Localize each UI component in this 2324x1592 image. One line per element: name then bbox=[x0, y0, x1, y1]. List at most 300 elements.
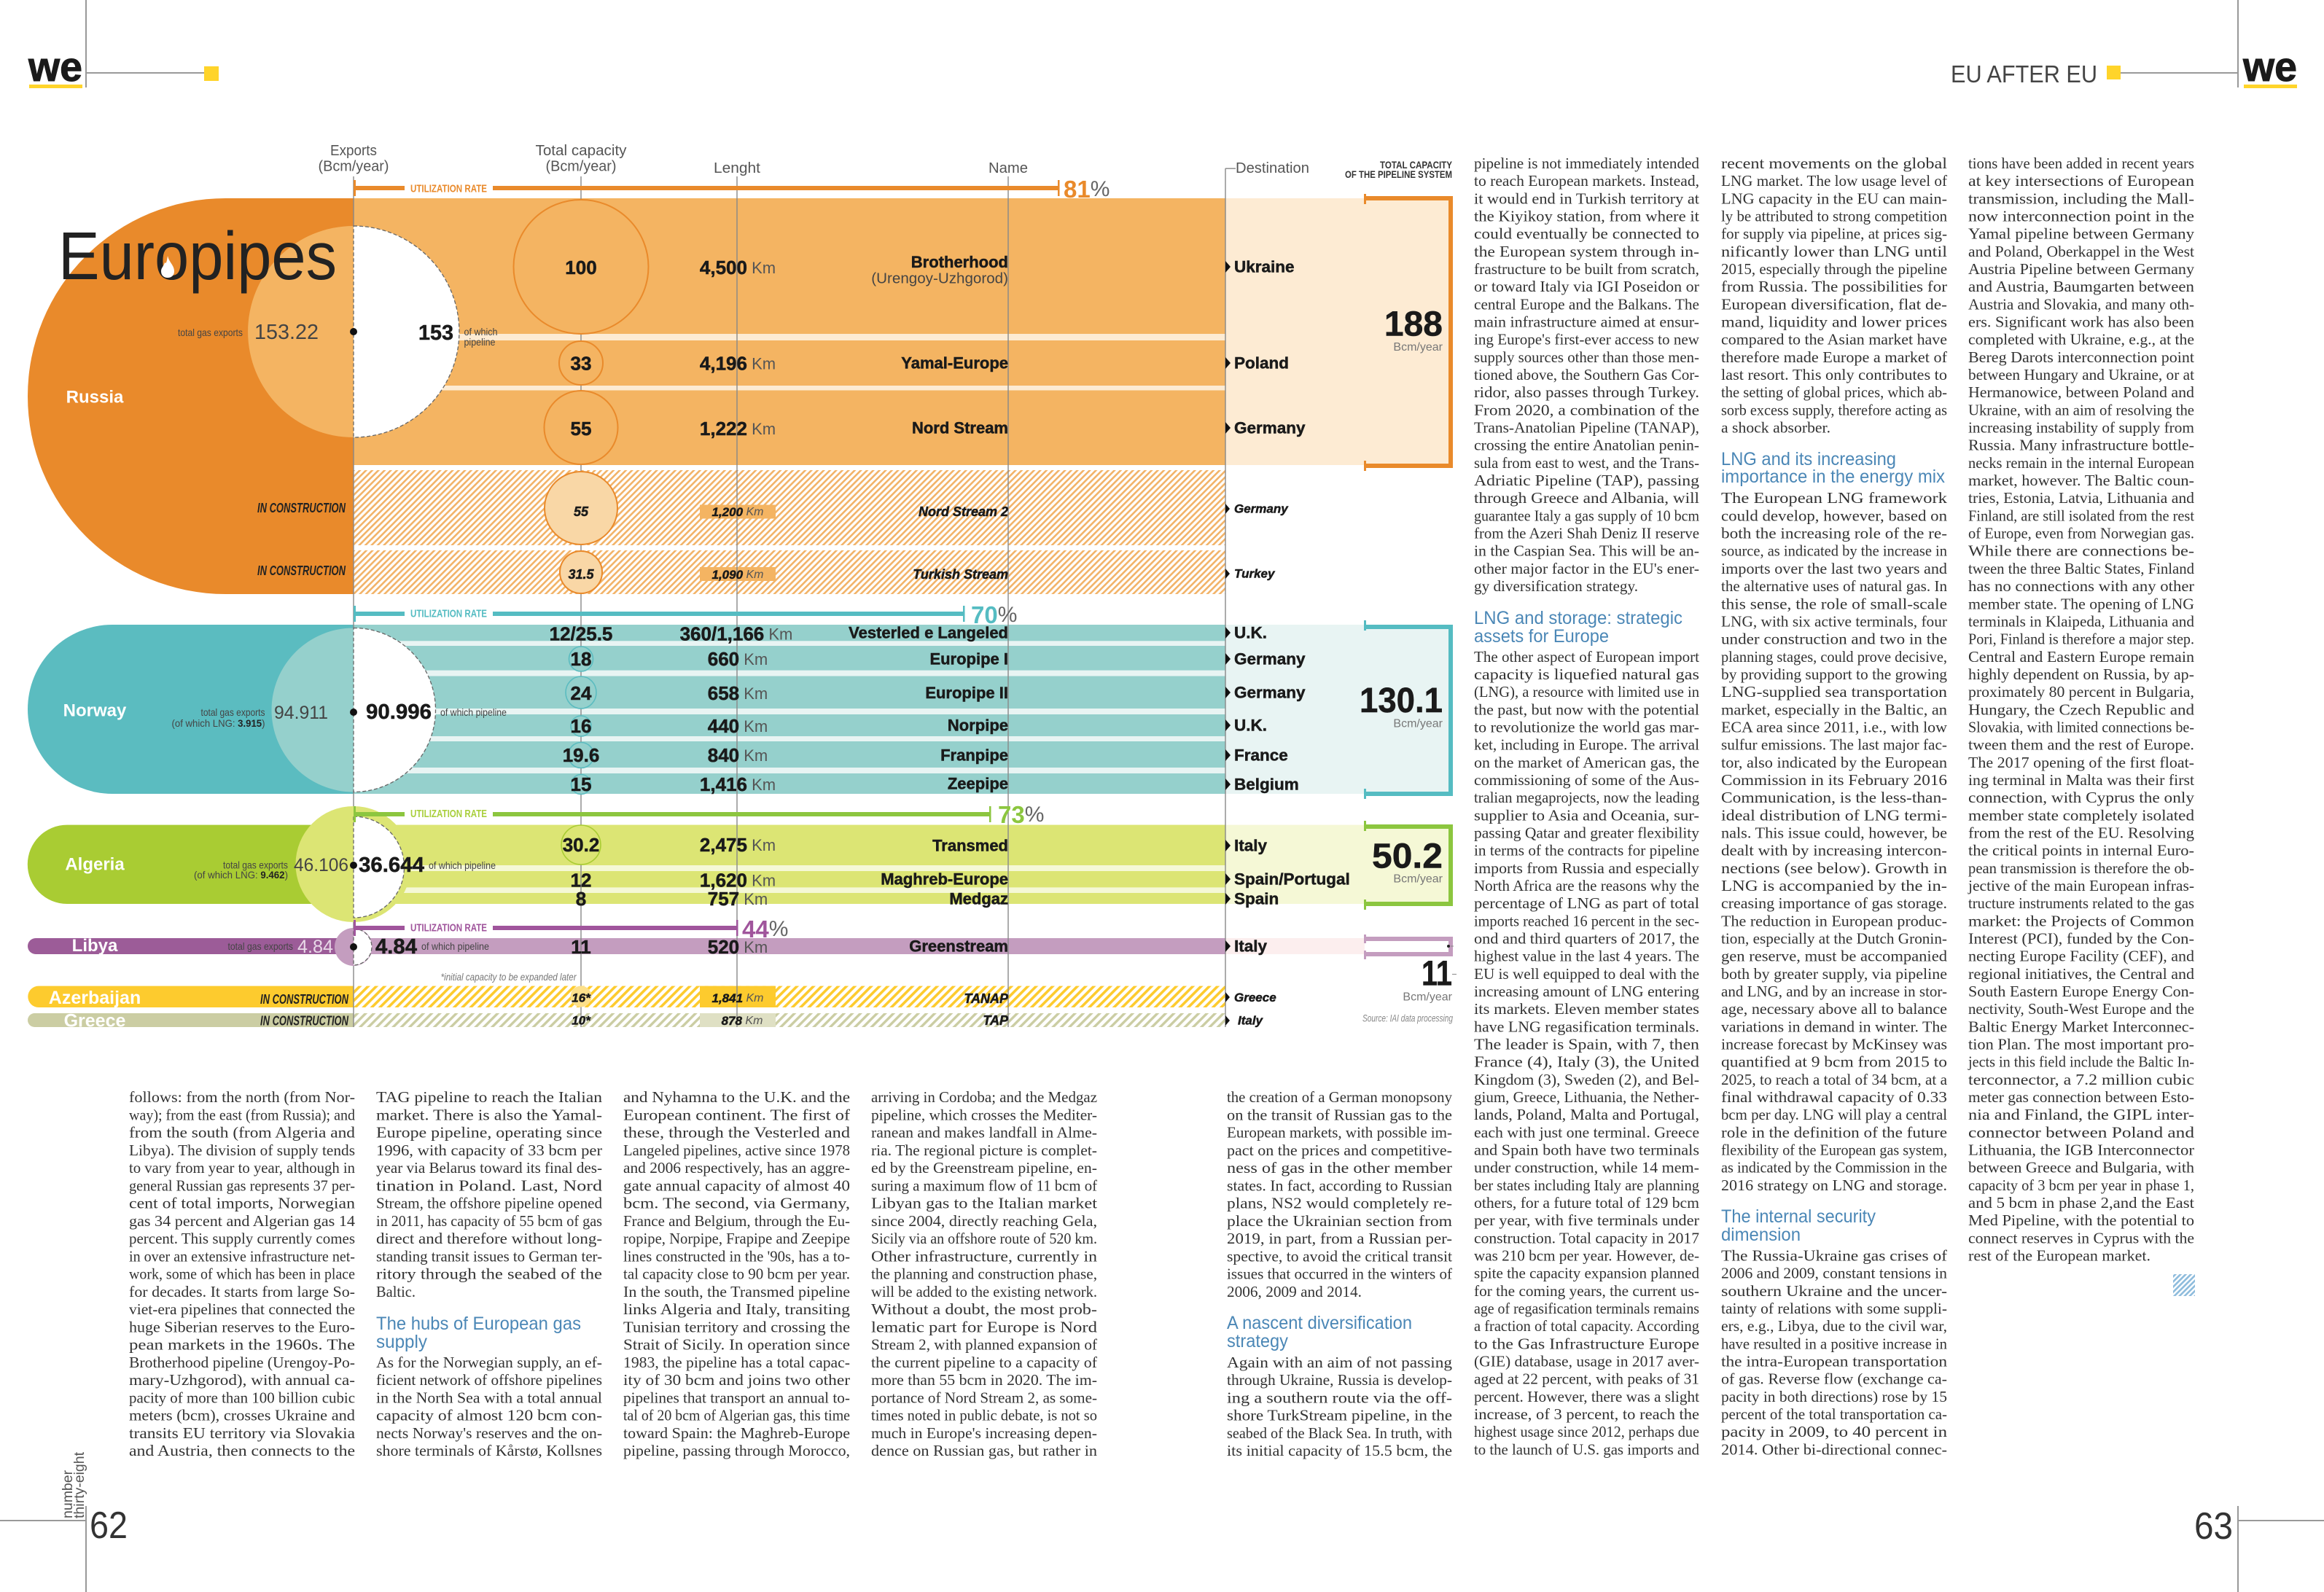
stat: 4.84 of which pipeline: of which pipeline bbox=[421, 940, 489, 952]
text column 8: connector between Poland and bbox=[1968, 1123, 2195, 1141]
text column 7: sulfur emissions. The last major fac- bbox=[1721, 736, 1947, 754]
bracket: Algeria total capacity 50.2: 50.2 bbox=[1372, 837, 1443, 876]
text column 3: European continent. The first of bbox=[623, 1106, 850, 1123]
stat: total gas exports 46.106: total gas exports bbox=[223, 859, 288, 870]
text column 6: supplier to Asia and Oceania, sur- bbox=[1474, 806, 1699, 824]
text column 7: pacity in both directions) rose by 15 bbox=[1721, 1388, 1947, 1405]
text column 7: ECA area since 2011, i.e., with low bbox=[1721, 718, 1948, 735]
text column 6: commissioning of some of the Aus- bbox=[1474, 771, 1699, 789]
row: Yamal-Europe bbox=[559, 341, 1289, 385]
text column 8: between Greece and Bulgaria, with bbox=[1968, 1159, 2195, 1177]
text column 4: more than 55 bcm in 2020. The im- bbox=[871, 1371, 1097, 1389]
text column 7: variations in demand in winter. The bbox=[1721, 1018, 1947, 1035]
row: Turkish Stream, in construction: IN CONSTRUCTION bbox=[257, 563, 346, 578]
text column 7: therefore made Europe a market of bbox=[1721, 348, 1947, 366]
text column 8: between Hungary and Ukraine, or at bbox=[1968, 366, 2194, 383]
stat: total gas exports 153.22: 153.22 bbox=[254, 321, 319, 344]
Algeria rows bbox=[65, 825, 1350, 910]
source note: Source: IAI data processing bbox=[1362, 1012, 1453, 1023]
text column 2: market. There is also the Yamal- bbox=[376, 1106, 602, 1123]
text column 5: the creation of a German monopsony bbox=[1227, 1088, 1452, 1106]
text column 6: imports from Russia and especially bbox=[1474, 859, 1700, 877]
logo underline left bbox=[29, 85, 82, 88]
text column 6: supply sources other than those men- bbox=[1474, 348, 1699, 366]
issue label bbox=[60, 1451, 87, 1518]
text column 7: the setting of global prices, which ab- bbox=[1721, 383, 1947, 401]
text column 2: shore terminals of Kårstø, Kollsnes bbox=[376, 1442, 602, 1459]
text column 1: pacity of more than 100 billion cubic bbox=[129, 1389, 355, 1406]
row: Europipe II bbox=[566, 676, 1306, 709]
text column 5: Again with an aim of not passing bbox=[1227, 1354, 1453, 1371]
text column 7: under construction and two in the bbox=[1721, 631, 1947, 648]
text column 6: or toward Italy via IGI Poseidon or bbox=[1474, 278, 1699, 295]
text column 6: to the launch of U.S. gas imports and bbox=[1474, 1440, 1699, 1458]
text column 6: to revolutionize the world gas mar- bbox=[1474, 718, 1699, 735]
text column 7: bcm per day. LNG will play a central bbox=[1721, 1106, 1947, 1123]
stat: total gas exports 153.22 bbox=[178, 321, 357, 344]
text column 1: Libya). The division of supply tends bbox=[129, 1142, 355, 1159]
text column 6: percent. However, there was a slight bbox=[1474, 1388, 1699, 1405]
text column 1: percent. This supply currently comes bbox=[129, 1230, 355, 1247]
row: Europipe II: Germany bbox=[1234, 684, 1306, 701]
text column 7: 2015, especially through the pipeline bbox=[1721, 260, 1947, 278]
icon: yellow square left bbox=[204, 66, 219, 81]
text column 8: tries, Estonia, Latvia, Lithuania and bbox=[1968, 489, 2195, 507]
row: Azerbaijan TANAP: TANAP bbox=[964, 991, 1009, 1006]
row: Yamal-Europe: Poland bbox=[1234, 354, 1289, 372]
text column 6: increasing amount of LNG entering bbox=[1474, 983, 1700, 1000]
text column 7: LNG-supplied sea transportation bbox=[1721, 683, 1948, 701]
text column 6: to the Gas Infrastructure Europe bbox=[1474, 1335, 1699, 1352]
row: Azerbaijan TANAP: Azerbaijan bbox=[49, 988, 141, 1008]
text column 4: Without a doubt, the most prob- bbox=[871, 1300, 1097, 1318]
row: Brotherhood: (Urengoy-Uzhgorod) bbox=[871, 270, 1008, 287]
text column 5 bbox=[1227, 1088, 1453, 1459]
text column 8: Slovakia, with limited connections be- bbox=[1968, 718, 2194, 735]
heading: LNG and its increasing importance: importance in the energy mix bbox=[1721, 467, 1945, 487]
text column 6: ing Europe's first-ever access to new bbox=[1474, 331, 1700, 348]
text column 5: place the Ukrainian section from bbox=[1227, 1212, 1452, 1230]
heading: The internal security dimension bbox=[1721, 1206, 1876, 1245]
header right: section title and logo bbox=[1951, 0, 2297, 90]
text column 6: lands, Poland, Malta and Portugal, bbox=[1474, 1106, 1699, 1123]
text column 1: way); from the east (from Russia); and bbox=[129, 1106, 355, 1123]
text column 8: Baltic Energy Market Interconnec- bbox=[1968, 1018, 2194, 1035]
row: Zeepipe bbox=[571, 773, 1299, 795]
text column 8: Finland, are still isolated from the rest bbox=[1968, 507, 2194, 524]
text column 6: Trans-Anatolian Pipeline (TANAP), bbox=[1474, 419, 1699, 437]
text column 6: France (4), Italy (3), the United bbox=[1474, 1053, 1700, 1071]
text column 3: 1983, the pipeline has a total capac- bbox=[623, 1354, 850, 1371]
text column 8: member state. The opening of LNG bbox=[1968, 595, 2194, 612]
text column 3: Tunisian territory and crossing the bbox=[623, 1318, 850, 1335]
text column 8: tween them and the rest of Europe. bbox=[1968, 736, 2194, 754]
stat: total gas exports 46.106: 46.106 bbox=[294, 855, 348, 875]
text column 3: In the south, the Transmed pipeline bbox=[623, 1283, 850, 1300]
text column 5: shore TurkStream pipeline, in the bbox=[1227, 1407, 1452, 1424]
text column 3: gate annual capacity of almost 40 bbox=[623, 1177, 850, 1194]
text column 7: pacity in 2009, to 40 percent in bbox=[1721, 1423, 1948, 1440]
stat: 36.644 of which pipeline: of which pipeline bbox=[429, 859, 496, 871]
row: Europipe I: 660 Km bbox=[708, 648, 768, 670]
text column 2: ficient network of offshore pipelines bbox=[376, 1371, 602, 1389]
text column 8: from the rest of the EU. Resolving bbox=[1968, 824, 2195, 841]
text column 4: Stream 2, with planned expansion of bbox=[871, 1335, 1097, 1353]
text column 6: Adriatic Pipeline (TAP), passing bbox=[1474, 472, 1700, 489]
stat: 36.644 of which pipeline bbox=[359, 854, 496, 877]
text column 6: guarantee Italy a gas supply of 10 bcm bbox=[1474, 507, 1699, 524]
header: name: Name bbox=[989, 160, 1028, 176]
row: Maghreb-Europe bbox=[571, 869, 1350, 891]
text column 2: nects Norway's reserves and the on- bbox=[376, 1424, 602, 1442]
text column 6: under construction, while 14 mem- bbox=[1474, 1159, 1699, 1177]
text column 7: imports over the last two years and bbox=[1721, 560, 1948, 577]
text column 4: much in Europe's increasing depen- bbox=[871, 1424, 1097, 1442]
panel: Norway capsule and pipeline bars bbox=[28, 625, 1451, 794]
text column 7: this sense, the role of small-scale bbox=[1721, 595, 1947, 612]
text column 8: Med Pipeline, with the potential to bbox=[1968, 1211, 2194, 1229]
chart: Norway utilization rate 70% bbox=[354, 601, 1017, 628]
row: Greenstream: Italy bbox=[1234, 937, 1268, 955]
text column 5: states. In fact, according to Russian bbox=[1227, 1177, 1453, 1194]
header: length: Lenght bbox=[714, 160, 760, 176]
text column 8: pean transmission is therefore the ob- bbox=[1968, 859, 2194, 877]
bracket: Norway total capacity 130.1: 130.1 bbox=[1360, 682, 1443, 720]
text column 8: ers. Significant work has also been bbox=[1968, 313, 2195, 331]
text column 8: of Europe, even from Norwegian gas. bbox=[1968, 525, 2194, 542]
text column 7: age, necessary above all to balance bbox=[1721, 1000, 1947, 1018]
row: Europipe I: Europipe I bbox=[929, 650, 1008, 668]
text column 6: in the Caspian Sea. This will be an- bbox=[1474, 542, 1699, 560]
row: Vesterled e Langeled bbox=[550, 623, 1267, 644]
row: Medgaz: Spain bbox=[1234, 889, 1279, 908]
text column 6: from the Azeri Shah Deniz II reserve bbox=[1474, 525, 1699, 542]
text column 8: Interest (PCI), funded by the Con- bbox=[1968, 930, 2194, 948]
text column 8: Pori, Finland is therefore a major step. bbox=[1968, 631, 2194, 648]
text column 8: connect reserves in Cyprus with the bbox=[1968, 1229, 2194, 1246]
row: Yamal-Europe: 4,196 Km bbox=[700, 353, 776, 375]
text column 5: European markets, with possible im- bbox=[1227, 1124, 1452, 1142]
logo: we left: we bbox=[28, 44, 82, 90]
bracket: Libya total capacity 11: Bcm/year bbox=[1403, 991, 1453, 1003]
text column 8: has no connections with any other bbox=[1968, 577, 2194, 595]
row: Nord Stream: Germany bbox=[1234, 418, 1306, 437]
text column 7: as indicated by the Commission in the bbox=[1721, 1159, 1947, 1177]
row: Turkish Stream, in construction bbox=[257, 551, 1276, 593]
text column 3: pipelines that transport an annual to- bbox=[623, 1389, 850, 1406]
text column 7: ideal distribution of LNG termi- bbox=[1721, 806, 1947, 824]
text column 6: sula from east to west, and the Trans- bbox=[1474, 454, 1699, 472]
heading: LNG and storage: assets for Europe bbox=[1474, 626, 1609, 647]
text column 6: (GIE) database, usage in 2017 aver- bbox=[1474, 1353, 1699, 1370]
text column 8: terminals in Klaipeda, Lithuania and bbox=[1968, 612, 2194, 630]
text column 6: main infrastructure aimed at ensur- bbox=[1474, 313, 1699, 331]
text column 7: both the increasing role of the re- bbox=[1721, 525, 1947, 542]
text column 7: and LNG, and by an increase in stor- bbox=[1721, 983, 1947, 1000]
row: Nord Stream: Nord Stream bbox=[912, 418, 1008, 437]
row: Franpipe bbox=[563, 742, 1288, 768]
text column 3: tal of 20 bcm of Algerian gas, this time bbox=[623, 1407, 850, 1424]
text column 5: ness of gas in the other member bbox=[1227, 1159, 1452, 1177]
chart: Norway utilization rate 70%: 70% bbox=[971, 601, 1017, 628]
text column 6: percentage of LNG as part of total bbox=[1474, 894, 1699, 912]
stat: 153 of which pipeline: of which bbox=[464, 326, 497, 337]
text column 1: transits EU territory via Slovakia bbox=[129, 1424, 356, 1442]
panel: Azerbaijan capsule and hatched bar bbox=[28, 986, 1225, 1007]
icon: Libya exports circle bbox=[335, 928, 373, 966]
text column 4 bbox=[871, 1088, 1098, 1459]
text column 7: tor, also indicated by the European bbox=[1721, 754, 1948, 771]
text column 1: follows: from the north (from Nor- bbox=[129, 1088, 355, 1106]
row: Franpipe: 19.6 bbox=[563, 744, 599, 766]
text column 3 bbox=[623, 1088, 851, 1459]
stat: 4.84 of which pipeline: 4.84 bbox=[375, 935, 417, 959]
heading: LNG and storage bbox=[1474, 608, 1682, 647]
text column 8: now interconnection point in the bbox=[1968, 207, 2194, 225]
heading: LNG and storage: LNG and storage: strategic bbox=[1474, 608, 1682, 628]
panel: Libya capsule and pipeline bar bbox=[28, 938, 1365, 954]
text column 5: ing a southern route via the off- bbox=[1227, 1389, 1452, 1406]
text column 6: construction. Total capacity in 2017 bbox=[1474, 1229, 1699, 1246]
text column 3: and Nyhamna to the U.K. and the bbox=[623, 1088, 850, 1106]
text column 8: connection, with Cyprus the only bbox=[1968, 789, 2195, 806]
bracket: Russia total capacity 188 bbox=[1364, 194, 1451, 471]
text column 8: capacity of 3 bcm per year in phase 1, bbox=[1968, 1177, 2194, 1194]
row: Europipe I: Germany bbox=[1234, 650, 1306, 668]
heading: LNG and its increasing importance: LNG and its increasing bbox=[1721, 449, 1896, 469]
text column 8: Central and Eastern Europe remain bbox=[1968, 648, 2195, 666]
row: Zeepipe: 15 bbox=[571, 773, 591, 795]
row: Zeepipe: Belgium bbox=[1234, 776, 1299, 793]
issue label: number bbox=[60, 1470, 76, 1518]
text column 7: a shock absorber. bbox=[1721, 419, 1830, 437]
label: Libya: Libya bbox=[72, 936, 118, 956]
row: Norpipe: U.K. bbox=[1234, 716, 1267, 735]
text column 5: on the transit of Russian gas to the bbox=[1227, 1106, 1452, 1123]
text column 1: to vary from year to year, although in bbox=[129, 1159, 355, 1177]
text column 8: necting Europe Facility (CEF), and bbox=[1968, 948, 2195, 965]
text column 7: quantified at 9 bcm from 2015 to bbox=[1721, 1053, 1947, 1071]
text column 2: tination in Poland. Last, Nord bbox=[376, 1177, 603, 1194]
row: Greece TAP: IN CONSTRUCTION bbox=[260, 1013, 349, 1028]
text column 6: aged at 22 percent, with peaks of 31 bbox=[1474, 1370, 1699, 1388]
heading: The internal security dimension: dimension bbox=[1721, 1225, 1801, 1245]
text column 1: viet-era pipelines that connected the bbox=[129, 1300, 355, 1318]
text column 4: lematic part for Europe is Nord bbox=[871, 1318, 1098, 1335]
text column 8: transmission, including the Mall- bbox=[1968, 190, 2194, 207]
chart: Algeria utilization rate 73%: UTILIZATION RATE bbox=[410, 808, 487, 820]
text column 1: gas 34 percent and Algerian gas 14 bbox=[129, 1212, 356, 1230]
column headers: OF THE PIPELINE SYSTEM bbox=[1345, 168, 1452, 180]
text column 6: on the market of American gas, the bbox=[1474, 754, 1699, 771]
text column 4: times noted in public debate, is not so bbox=[871, 1407, 1097, 1424]
text column 7: tainty of relations with some suppli- bbox=[1721, 1300, 1947, 1317]
row: Greece TAP: Italy bbox=[1238, 1013, 1264, 1028]
row: Medgaz bbox=[576, 888, 1279, 910]
row: Turkish Stream, in construction: Turkey bbox=[1234, 567, 1276, 580]
text column 7: The European LNG framework bbox=[1721, 489, 1948, 507]
text column 6: others, for a future total of 129 bcm bbox=[1474, 1194, 1699, 1211]
row: Franpipe: France bbox=[1234, 746, 1288, 764]
text column 6: it would end in Turkish territory at bbox=[1474, 190, 1699, 207]
text column 8: terconnector, a 7.2 million cubic bbox=[1968, 1071, 2194, 1088]
stat: total gas exports 94.911 bbox=[172, 703, 357, 729]
text column 7: final withdrawal capacity of 0.33 bbox=[1721, 1088, 1947, 1106]
issue label: thirty-eight bbox=[71, 1451, 87, 1518]
bracket: Russia total capacity 188: 188 bbox=[1384, 305, 1443, 344]
text column 8: the critical points in internal Euro- bbox=[1968, 842, 2194, 859]
stat: 153 of which pipeline: 153 bbox=[418, 321, 453, 345]
row: Vesterled e Langeled: 360/1,166 Km bbox=[680, 623, 792, 644]
text column 4: since 2004, directly reaching Gela, bbox=[871, 1212, 1097, 1230]
text column 8: meter gas connection between Esto- bbox=[1968, 1088, 2194, 1106]
row: Greenstream: 520 Km bbox=[708, 936, 768, 958]
text column 1: in over an extensive infrastructure net- bbox=[129, 1247, 355, 1265]
text column 8: rest of the European market. bbox=[1968, 1246, 2151, 1264]
text column 4: the planning and construction phase, bbox=[871, 1265, 1097, 1283]
text column 8: and Austria, Baumgarten between bbox=[1968, 278, 2195, 295]
Russia rows bbox=[66, 200, 1306, 593]
row: Brotherhood: Ukraine bbox=[1234, 258, 1295, 276]
text column 5: issues that occurred in the winters of bbox=[1227, 1265, 1452, 1283]
text column 4: suring a maximum flow of 11 bcm of bbox=[871, 1177, 1097, 1194]
text column 6: highest value in the last 4 years. The bbox=[1474, 948, 1699, 965]
text column 6: gy diversification strategy. bbox=[1474, 577, 1638, 595]
text column 7: LNG, with six active terminals, four bbox=[1721, 612, 1947, 630]
text column 7: gen reserve, must be accompanied bbox=[1721, 948, 1948, 965]
text column 7: planning stages, could prove decisive, bbox=[1721, 648, 1947, 666]
header: total capacity: Total capacity bbox=[535, 143, 627, 159]
column headers: (Bcm/year) bbox=[545, 159, 617, 175]
text column 8: The 2017 opening of the first float- bbox=[1968, 754, 2194, 771]
text column 4: Other infrastructure, currently in bbox=[871, 1247, 1098, 1265]
row: Turkish Stream, in construction: 31.5 bbox=[568, 567, 594, 582]
stat: 90.996 of which pipeline bbox=[366, 701, 507, 724]
text column 6: From 2020, a combination of the bbox=[1474, 401, 1699, 418]
row: Brotherhood: Brotherhood bbox=[911, 253, 1008, 271]
text column 7: mand, liquidity and lower prices bbox=[1721, 313, 1947, 331]
page number 62: 62 bbox=[90, 1505, 128, 1547]
text column 8: market, however. The Baltic coun- bbox=[1968, 472, 2194, 489]
heading: A nascent diversification strategy bbox=[1227, 1313, 1412, 1351]
bracket: Algeria total capacity 50.2 bbox=[1364, 821, 1451, 910]
row: Nord Stream 2, in construction bbox=[257, 472, 1289, 545]
heading: A nascent diversification strategy: strategy bbox=[1227, 1331, 1288, 1351]
stat: total gas exports 4.84: 4.84 bbox=[297, 937, 333, 957]
text column 4: the current pipeline to a capacity of bbox=[871, 1354, 1097, 1371]
column headers bbox=[318, 143, 1453, 180]
text column 8: Hermanowice, between Poland and bbox=[1968, 383, 2195, 401]
text column 1: from the south (from Algeria and bbox=[129, 1124, 356, 1142]
text column 3: ropipe, Norpipe, Frapipe and Zeepipe bbox=[623, 1230, 850, 1247]
icon: Norway exports circle bbox=[272, 628, 436, 792]
text column 6: The leader is Spain, with 7, then bbox=[1474, 1035, 1700, 1053]
text column 8: tion Plan. The most important pro- bbox=[1968, 1035, 2194, 1053]
text column 8: necks remain in the internal European bbox=[1968, 454, 2194, 472]
bracket: Libya total capacity 11 bbox=[1364, 934, 1457, 1003]
chart: Russia utilization rate 81%: UTILIZATION RATE bbox=[410, 182, 487, 195]
row: Transmed: 2,475 Km bbox=[700, 834, 776, 856]
text column 2 bbox=[376, 1088, 603, 1459]
text column 6: a fraction of total capacity. According bbox=[1474, 1317, 1699, 1335]
text column 3: lines constructed in the '90s, has a to- bbox=[623, 1247, 850, 1265]
column headers: (Bcm/year) bbox=[318, 159, 389, 175]
stat: total gas exports 94.911: (of which LNG: 3.915) bbox=[172, 717, 265, 729]
text column 6: ridor, also passes through Turkey. bbox=[1474, 383, 1699, 401]
icon: Algeria exports circle bbox=[296, 806, 411, 922]
text column 7: by providing support to the growing bbox=[1721, 666, 1947, 683]
column axes bbox=[353, 168, 1236, 1027]
chart: Libya utilization rate 44% bbox=[354, 916, 788, 942]
text column 2: capacity of almost 120 bcm con- bbox=[376, 1407, 602, 1424]
text column 7: The Russia-Ukraine gas crises of bbox=[1721, 1246, 1947, 1264]
text column 7: source, as indicated by the increase in bbox=[1721, 542, 1947, 560]
text column 7: 2016 strategy on LNG and storage. bbox=[1721, 1177, 1947, 1194]
label: Norway: Norway bbox=[63, 701, 127, 720]
text column 3: ity of 30 bcm and joins two other bbox=[623, 1371, 850, 1389]
row: Europipe I bbox=[569, 647, 1306, 671]
text column 6: tioned above, the Southern Gas Cor- bbox=[1474, 366, 1699, 383]
text column 6: ber states including Italy are planning bbox=[1474, 1177, 1699, 1194]
text column 8: Hungary, the Czech Republic and bbox=[1968, 701, 2195, 718]
text column 7: of gas. Reverse flow (exchange ca- bbox=[1721, 1370, 1947, 1388]
text column 8: Austria and Slovakia, and many oth- bbox=[1968, 295, 2194, 313]
text column 2: direct and therefore without long- bbox=[376, 1230, 602, 1247]
row: Medgaz: 757 Km bbox=[708, 888, 768, 910]
bracket: Norway total capacity 130.1 bbox=[1360, 620, 1451, 799]
stat: 36.644 of which pipeline: 36.644 bbox=[359, 854, 424, 877]
heading: LNG and its increasing importance bbox=[1721, 449, 1945, 487]
text column 4: arriving in Cordoba; and the Medgaz bbox=[871, 1088, 1097, 1106]
text column 7: the intra-European transportation bbox=[1721, 1353, 1948, 1370]
text column 7: role in the definition of the future bbox=[1721, 1123, 1947, 1141]
text column 7: ers, e.g., Libya, due to the civil war, bbox=[1721, 1317, 1947, 1335]
text column 7: LNG is accompanied by the in- bbox=[1721, 877, 1947, 894]
text column 4: ranean and makes landfall in Alme- bbox=[871, 1124, 1097, 1142]
text column 1: Brotherhood pipeline (Urengoy-Po- bbox=[129, 1354, 355, 1371]
row: Transmed bbox=[561, 825, 1268, 865]
text column 7: tion, especially at the Dutch Gronin- bbox=[1721, 930, 1947, 948]
text column 5: 2019, in part, from a Russian per- bbox=[1227, 1230, 1452, 1247]
stat: total gas exports 4.84: total gas exports bbox=[227, 940, 293, 952]
stat: total gas exports 94.911: total gas exports bbox=[201, 706, 265, 718]
row: Greenstream: Greenstream bbox=[909, 937, 1008, 955]
row: Azerbaijan TANAP: 16* bbox=[572, 991, 591, 1004]
text column 8: regional initiatives, the Central and bbox=[1968, 965, 2195, 983]
row: Greece TAP: TAP bbox=[983, 1013, 1009, 1028]
icon: flame bbox=[161, 256, 174, 278]
bracket: Algeria total capacity 50.2: Bcm/year bbox=[1393, 873, 1443, 885]
text column 8: market: the Projects of Common bbox=[1968, 912, 2195, 929]
row: Europipe II: 658 Km bbox=[708, 682, 768, 704]
row: Nord Stream 2, in construction: Germany bbox=[1234, 502, 1289, 516]
text column 7: southern Ukraine and the uncer- bbox=[1721, 1282, 1947, 1300]
panel: Greece capsule and hatched bar bbox=[28, 1013, 1225, 1027]
text column 7: have resulted in a positive increase in bbox=[1721, 1335, 1947, 1352]
row: Brotherhood: 4,500 Km bbox=[700, 257, 776, 278]
heading: The internal security dimension: The internal security bbox=[1721, 1206, 1876, 1227]
footer left: page 62 and issue label bbox=[0, 1451, 128, 1592]
text column 7: sorb excess supply, therefore acting as bbox=[1721, 401, 1947, 418]
row: Turkish Stream, in construction: Turkish Stream bbox=[913, 567, 1008, 582]
text column 7: compared to the Asian market have bbox=[1721, 331, 1947, 348]
row: Nord Stream bbox=[544, 391, 1306, 464]
Libya row bbox=[72, 935, 1268, 959]
text column 7: 2006 and 2009, constant tensions in bbox=[1721, 1265, 1948, 1282]
text column 2: standing transit issues to German ter- bbox=[376, 1247, 602, 1265]
row: Transmed: 30.2 bbox=[563, 834, 599, 856]
text column 6: other major factor in the EU's ener- bbox=[1474, 560, 1699, 577]
